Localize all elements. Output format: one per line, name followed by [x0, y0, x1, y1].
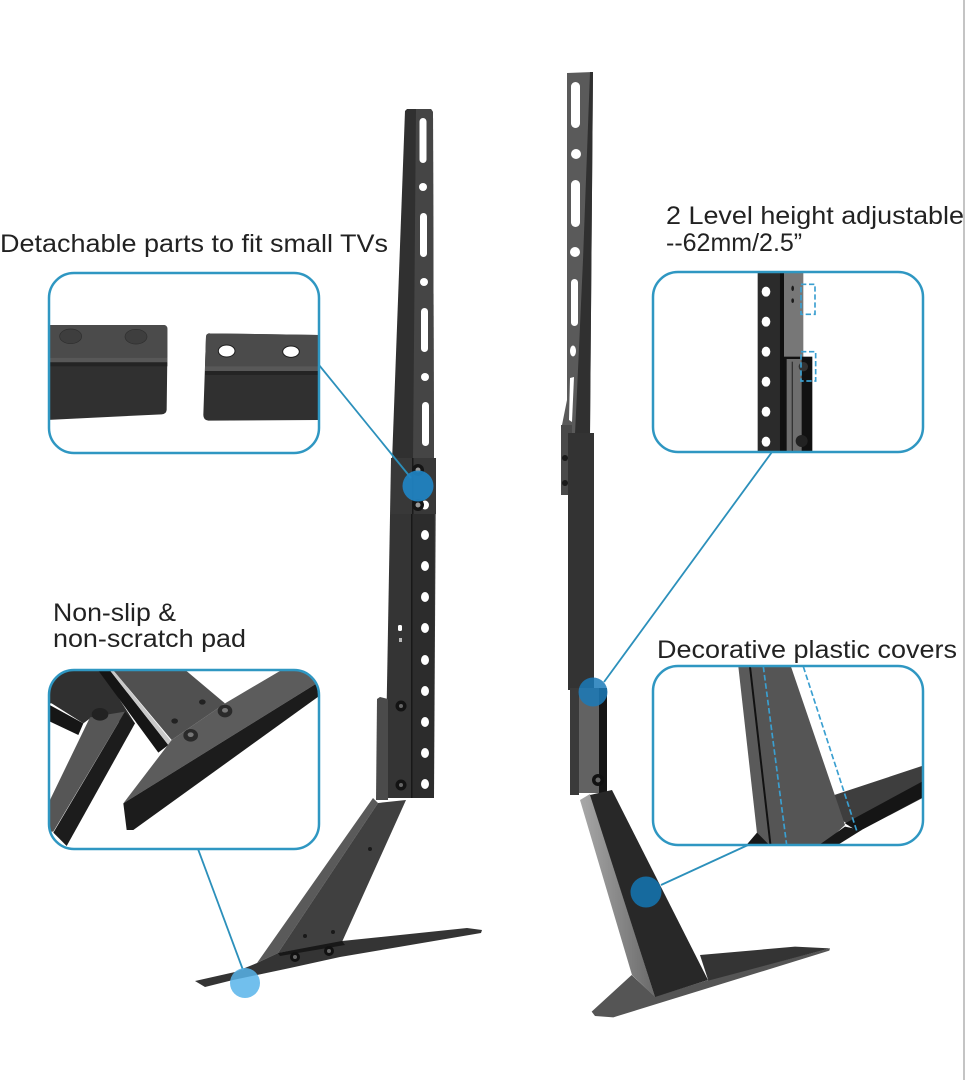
leader line: height adjustable	[604, 452, 772, 682]
heading: height adjustable: --62mm/2.5”	[666, 229, 802, 257]
foot	[592, 947, 830, 1017]
upper slotted bar	[562, 72, 593, 434]
marker dot: height adjustable	[578, 678, 608, 706]
angled leg	[257, 798, 406, 963]
marker dot: non-slip pad	[230, 968, 260, 998]
heading: non-slip pad	[53, 599, 246, 653]
panel: plastic covers	[653, 666, 925, 847]
panel border	[49, 670, 319, 849]
right edge line	[963, 0, 965, 1080]
heading: height adjustable: 2 Level height adjustable	[666, 202, 964, 230]
panel border	[653, 666, 923, 845]
leader line: detachable parts	[319, 365, 411, 478]
panel: height adjustable	[653, 272, 923, 452]
lower column	[561, 425, 607, 795]
flat foot	[195, 928, 482, 987]
detail: separated brackets	[47, 325, 320, 421]
marker dot: plastic covers	[630, 876, 662, 908]
left TV stand	[195, 109, 482, 987]
leader line: non-slip pad	[198, 849, 243, 970]
detail: covered leg	[738, 667, 925, 847]
upper slotted bar	[392, 109, 434, 462]
heading: non-slip pad: Non-slip &	[53, 599, 176, 627]
heading: non-slip pad: non-scratch pad	[53, 625, 246, 653]
panel border	[653, 272, 923, 452]
heading: detachable parts: Detachable parts to fit small TVs	[0, 230, 388, 258]
heading: height adjustable	[666, 202, 964, 257]
decorative cover leg	[580, 790, 708, 997]
detail: underside of foot	[47, 667, 318, 846]
side sleeve and screws	[376, 697, 406, 800]
panel: detachable parts	[47, 273, 320, 453]
right TV stand	[561, 72, 830, 1017]
lower sleeve with holes	[385, 458, 436, 798]
heading: plastic covers: Decorative plastic covers	[657, 636, 957, 664]
panel border	[49, 273, 319, 453]
panel: non-slip pad	[47, 667, 319, 849]
detail: height adjustment rail	[758, 272, 816, 452]
marker dot: detachable parts	[402, 470, 434, 502]
leader line: plastic covers	[661, 845, 748, 885]
